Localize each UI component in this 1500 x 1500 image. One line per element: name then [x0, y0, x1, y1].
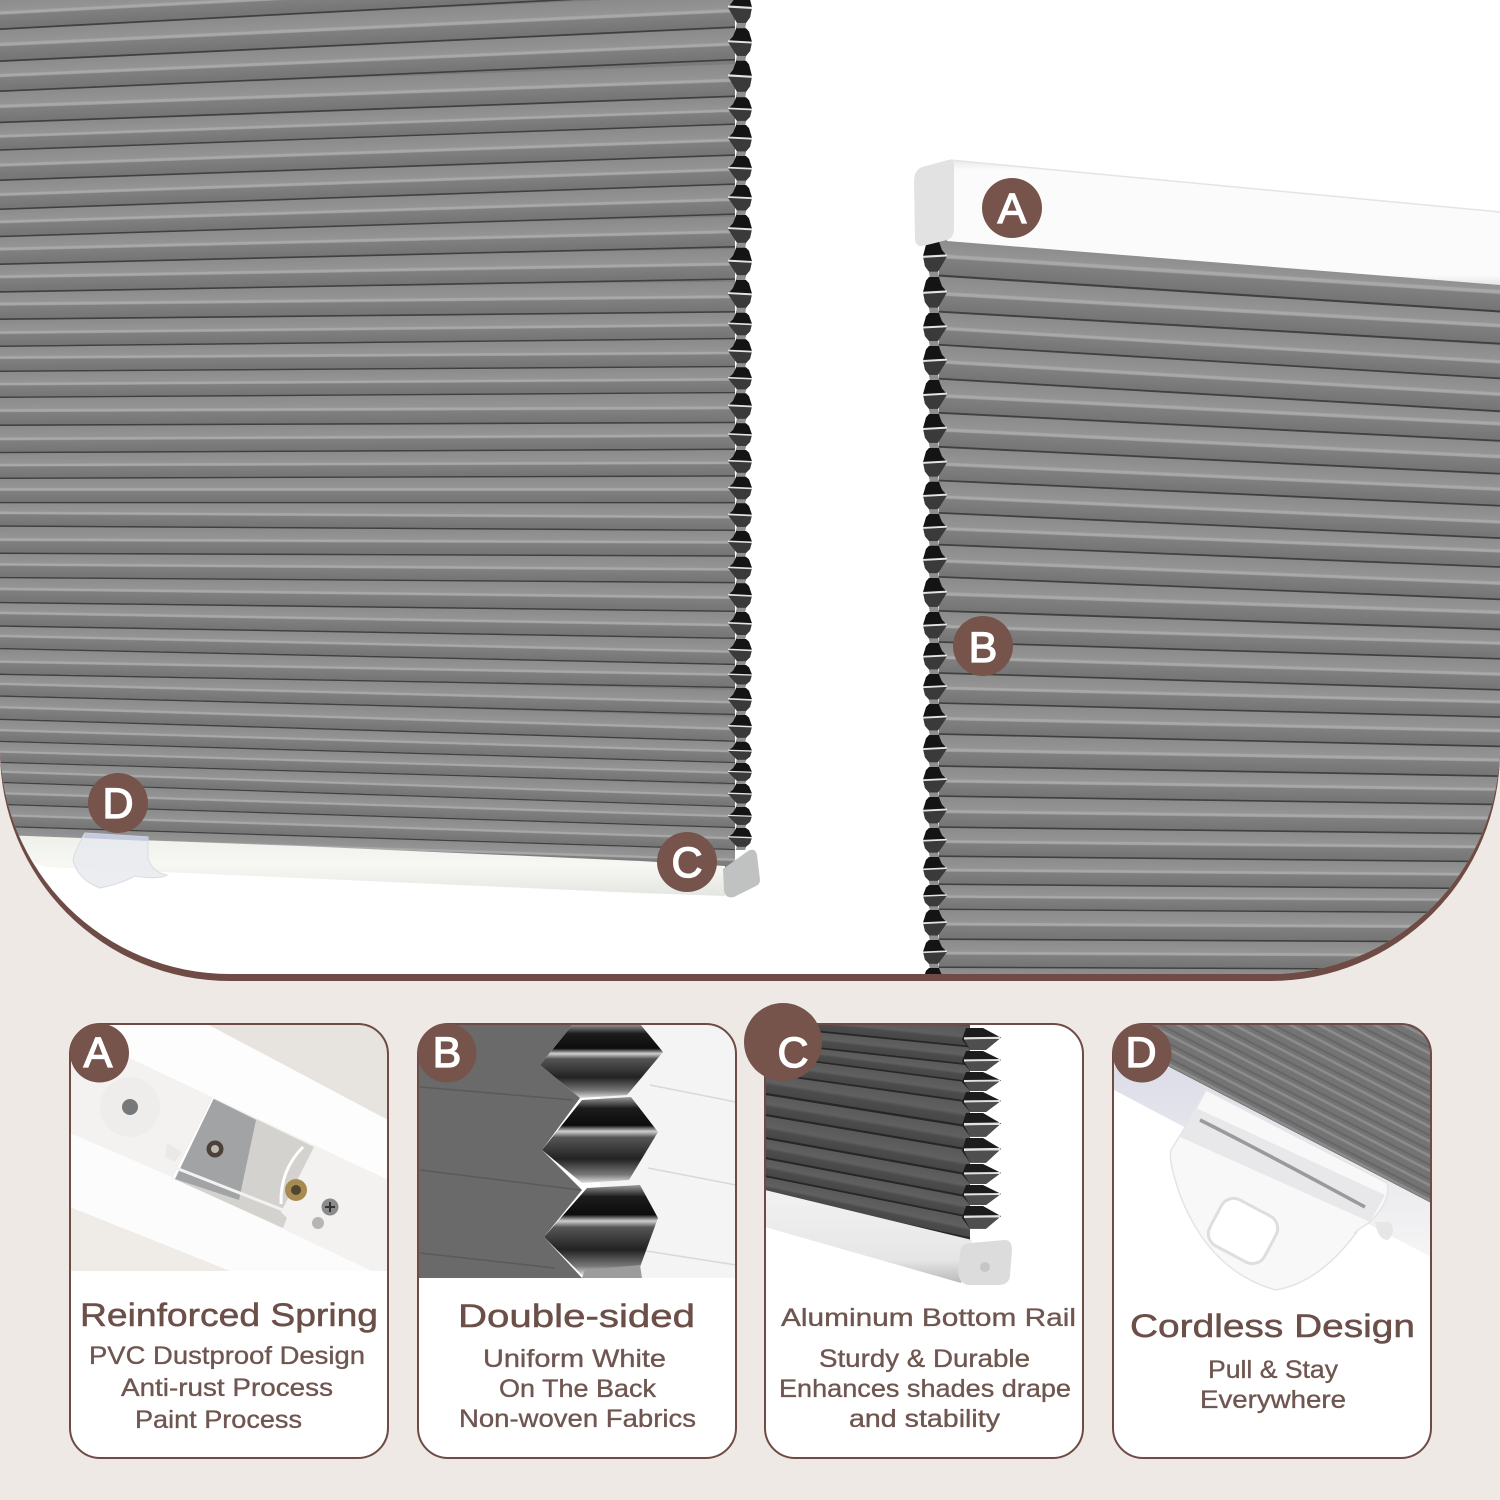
card D base	[1113, 1024, 1431, 1458]
card C frame	[765, 1024, 1083, 1458]
card B text: Non-woven Fabrics	[459, 1405, 696, 1433]
card A badge	[70, 1024, 129, 1082]
card C text: Sturdy & Durable	[819, 1345, 1030, 1373]
bottom rail	[0, 835, 760, 897]
card A badge: A	[84, 1029, 113, 1077]
bottom rail end cap	[723, 850, 760, 897]
clear cord clip	[73, 833, 167, 888]
top rail end cap	[914, 160, 954, 246]
card B text	[459, 1345, 696, 1433]
card C heading: Aluminum Bottom Rail	[781, 1304, 1076, 1332]
marker D: D	[102, 780, 134, 828]
card A frame	[70, 1024, 388, 1458]
card B photo: fabric cross-section	[418, 1024, 736, 1278]
card B base	[418, 1024, 736, 1458]
card B text: Uniform White	[483, 1345, 666, 1373]
left shade	[0, 0, 735, 872]
marker A	[982, 178, 1042, 238]
card A photo: headrail spring	[70, 1024, 388, 1271]
card B badge	[418, 1024, 476, 1082]
card D text	[1200, 1356, 1346, 1414]
card B frame	[418, 1024, 736, 1458]
hero white area	[0, 0, 1500, 974]
card D badge: D	[1125, 1029, 1157, 1077]
card C text: and stability	[849, 1405, 1001, 1433]
card A heading: Reinforced Spring	[80, 1297, 378, 1333]
card C photo: bottom rail	[766, 1025, 1012, 1285]
card C: aluminum bottom rail	[744, 1003, 1083, 1458]
card B: double-sided	[418, 1024, 736, 1458]
right shade edge cells	[923, 241, 947, 996]
marker C	[657, 832, 717, 892]
card C badge	[744, 1003, 822, 1081]
top rail	[914, 160, 1500, 285]
right shade	[939, 237, 1500, 1000]
panel: product hero	[0, 0, 1500, 1000]
card C badge: C	[777, 1029, 809, 1077]
card D text: Everywhere	[1200, 1386, 1346, 1414]
card D heading: Cordless Design	[1130, 1308, 1415, 1344]
card B badge: B	[433, 1029, 461, 1077]
card A text	[89, 1342, 365, 1434]
card D badge	[1112, 1024, 1172, 1082]
card C text: Enhances shades drape	[779, 1375, 1071, 1403]
card A text: PVC Dustproof Design	[89, 1342, 365, 1370]
card C base	[765, 1024, 1083, 1458]
card A base	[70, 1024, 388, 1458]
card B heading: Double-sided	[458, 1298, 695, 1334]
card B text: On The Back	[499, 1375, 657, 1403]
card D photo: clear pull clip	[1113, 1024, 1431, 1290]
card C text	[779, 1345, 1071, 1433]
left shade edge cells	[728, 0, 752, 850]
card A text: Paint Process	[135, 1406, 302, 1434]
marker C: C	[671, 839, 703, 887]
marker B	[953, 616, 1013, 676]
card A text: Anti-rust Process	[121, 1374, 333, 1402]
marker B: B	[969, 624, 997, 672]
card D frame	[1113, 1024, 1431, 1458]
card D text: Pull & Stay	[1208, 1356, 1339, 1384]
marker A: A	[998, 185, 1027, 233]
card D: cordless design	[1112, 1024, 1431, 1458]
hero frame	[0, 0, 1500, 981]
marker D	[88, 773, 148, 833]
card A: reinforced spring	[70, 1024, 388, 1458]
